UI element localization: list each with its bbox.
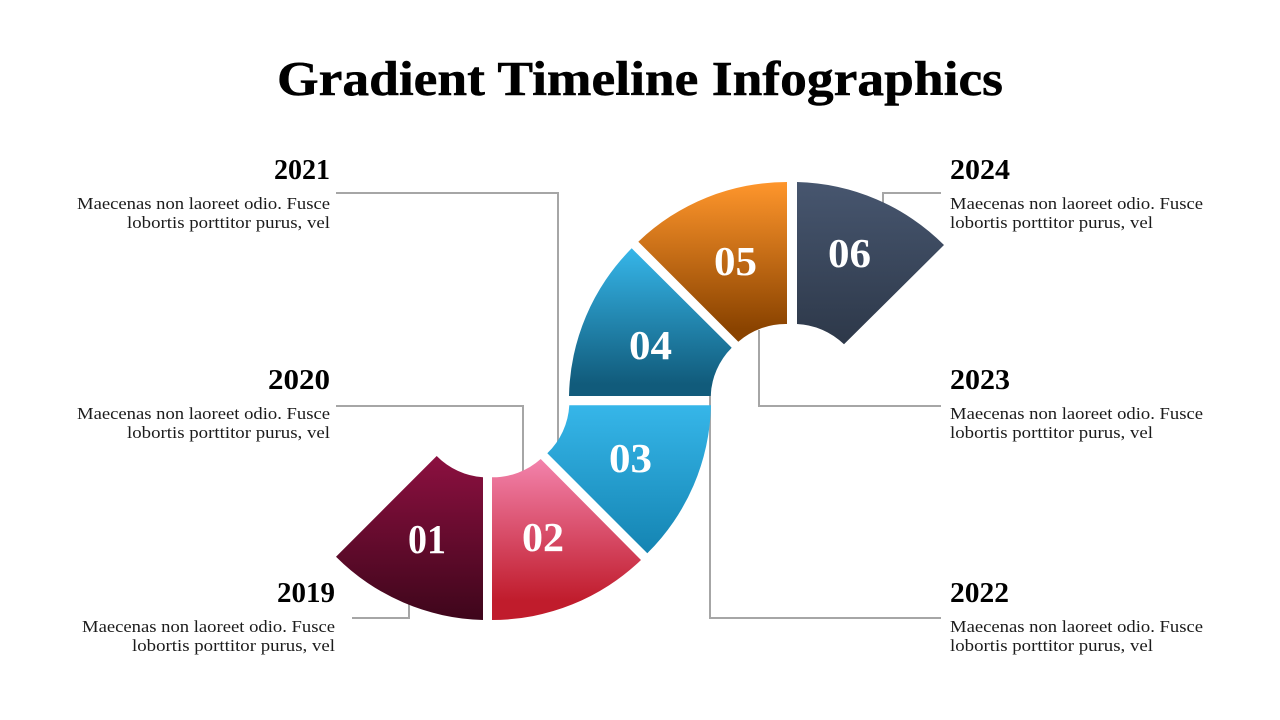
connector: 2024 xyxy=(883,193,941,205)
number 02: 02 xyxy=(522,514,564,560)
number 01: 01 xyxy=(408,516,446,562)
description 2024: Maecenas non laoreet odio. Fusce xyxy=(950,194,1203,213)
callout: 2024 xyxy=(950,155,1203,232)
year 2019: 2019 xyxy=(277,578,335,609)
description 2023: lobortis porttitor purus, vel xyxy=(950,423,1153,442)
description 2024 xyxy=(950,194,1203,232)
description 2021: lobortis porttitor purus, vel xyxy=(127,213,330,232)
callout: 2021 xyxy=(77,155,330,232)
year 2024: 2024 xyxy=(950,155,1010,186)
description 2023: Maecenas non laoreet odio. Fusce xyxy=(950,404,1203,423)
segment 01 xyxy=(336,456,483,620)
segment 05 xyxy=(638,182,787,342)
segment 03 xyxy=(547,405,711,553)
description 2019 xyxy=(82,617,335,655)
segment 06 xyxy=(797,182,944,344)
connector: 2022 xyxy=(710,380,941,618)
description 2019: Maecenas non laoreet odio. Fusce xyxy=(82,617,335,636)
connector: 2021 xyxy=(336,193,558,448)
description 2021 xyxy=(77,194,330,232)
number 06: 06 xyxy=(828,230,871,276)
title: Gradient Timeline Infographics xyxy=(277,51,1003,106)
number 05: 05 xyxy=(714,238,757,284)
callout: 2022 xyxy=(950,578,1203,655)
description 2024: lobortis porttitor purus, vel xyxy=(950,213,1153,232)
callout: 2020 xyxy=(77,365,330,442)
description 2022 xyxy=(950,617,1203,655)
description 2023 xyxy=(950,404,1203,442)
description 2019: lobortis porttitor purus, vel xyxy=(132,636,335,655)
description 2020: lobortis porttitor purus, vel xyxy=(127,423,330,442)
callout: 2019 xyxy=(82,578,335,655)
year 2020: 2020 xyxy=(268,365,330,396)
connector: 2019 xyxy=(352,600,409,618)
callout: 2023 xyxy=(950,365,1203,442)
description 2020: Maecenas non laoreet odio. Fusce xyxy=(77,404,330,423)
connector: 2023 xyxy=(759,330,941,406)
segment 02 xyxy=(492,459,641,620)
segment 04 xyxy=(569,248,732,396)
number 04: 04 xyxy=(629,322,672,368)
description 2022: lobortis porttitor purus, vel xyxy=(950,636,1153,655)
description 2021: Maecenas non laoreet odio. Fusce xyxy=(77,194,330,213)
year 2021: 2021 xyxy=(274,155,330,186)
year 2023: 2023 xyxy=(950,365,1010,396)
description 2020 xyxy=(77,404,330,442)
year 2022: 2022 xyxy=(950,578,1009,609)
number 03: 03 xyxy=(609,435,652,481)
description 2022: Maecenas non laoreet odio. Fusce xyxy=(950,617,1203,636)
connector: 2020 xyxy=(336,406,523,480)
